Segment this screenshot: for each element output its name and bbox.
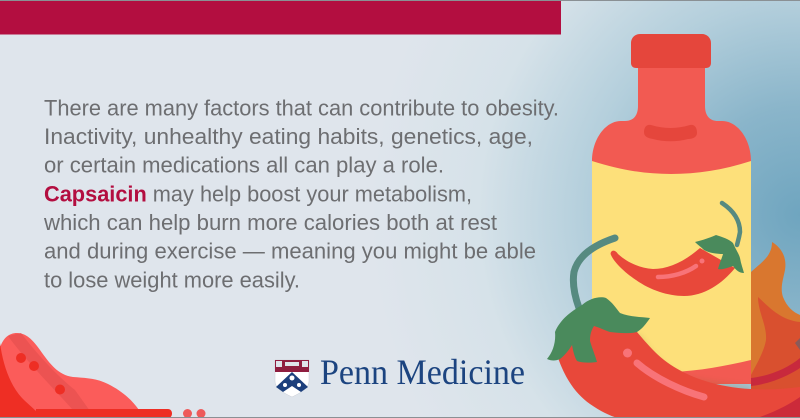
large chili stem xyxy=(573,238,615,308)
body text block: to lose weight more easily. xyxy=(44,268,300,292)
body text block: Capsaicin may help boost your metabolism, xyxy=(44,182,472,206)
body text block: Inactivity, unhealthy eating habits, genetics, age, xyxy=(44,124,533,149)
large chili highlights xyxy=(637,363,704,397)
bottle neck highlight xyxy=(644,125,697,141)
bottle body xyxy=(592,68,751,384)
blob dark left edge xyxy=(0,343,42,418)
body text block: There are many factors that can contribute to obesity. xyxy=(44,96,559,120)
Penn Medicine logo xyxy=(275,352,525,397)
large chili shadow xyxy=(620,334,751,392)
small chili body xyxy=(611,248,735,296)
illustration: flames behind bottle xyxy=(751,242,800,418)
illustration: hot sauce bottle xyxy=(592,34,751,384)
large chili dark tip xyxy=(757,397,800,418)
body text block xyxy=(43,96,559,292)
blob base bar xyxy=(36,409,172,418)
body text block: and during exercise — meaning you might be able xyxy=(44,238,536,264)
yellow label xyxy=(592,161,751,372)
bottle cap xyxy=(631,34,711,68)
blob diagonal stripe xyxy=(8,333,95,418)
large chili body xyxy=(558,320,800,418)
body text block: or certain medications all can play a role. xyxy=(44,152,444,178)
body text block: which can help burn more calories both at rest xyxy=(43,210,497,235)
small chili highlight xyxy=(658,266,696,277)
small chili leaves xyxy=(695,235,744,273)
top crimson banner xyxy=(0,0,561,34)
illustration: large chili pepper xyxy=(547,238,800,418)
Penn shield icon xyxy=(275,360,309,397)
small chili stem xyxy=(722,203,740,245)
large chili leaves xyxy=(547,297,650,363)
blob dots xyxy=(16,353,26,363)
Penn Medicine wordmark: Penn Medicine xyxy=(320,352,525,392)
illustration: small chili pepper xyxy=(611,203,744,296)
decorative bottom-left blob xyxy=(0,333,206,418)
